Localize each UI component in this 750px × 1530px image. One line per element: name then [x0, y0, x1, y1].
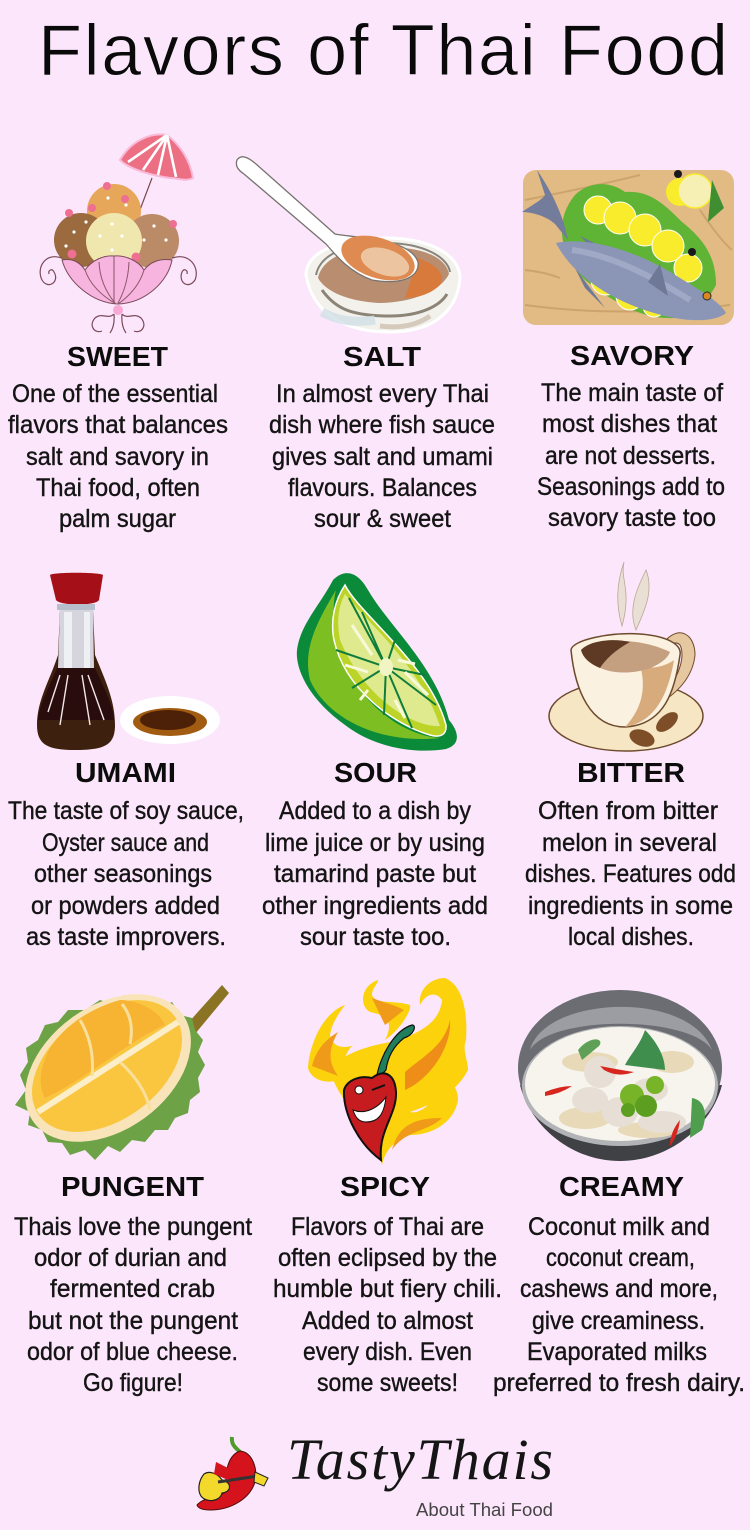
- panel: bitter: [525, 562, 736, 951]
- title: Flavors of Thai Food: [38, 11, 728, 91]
- icon: coffee cup with steam: [549, 562, 703, 751]
- text: savory description: most dishes that: [542, 410, 717, 438]
- tagline: About Thai Food: [416, 1500, 553, 1520]
- icon: bowl of fish sauce with spoon: [236, 157, 460, 332]
- text: sour description: sour taste too.: [300, 923, 451, 951]
- text: sweet description: [8, 380, 228, 533]
- panel: pungent: [0, 964, 252, 1397]
- text: bitter description: local dishes.: [568, 923, 694, 951]
- heading: creamy: CREAMY: [559, 1171, 684, 1202]
- text: savory description: The main taste of: [541, 379, 723, 407]
- panel: umami: [8, 573, 244, 951]
- text: creamy description: preferred to fresh dairy.: [493, 1369, 745, 1397]
- text: salt description: flavours. Balances: [288, 474, 477, 502]
- text: salt description: In almost every Thai: [276, 380, 489, 408]
- text: sweet description: One of the essential: [12, 380, 218, 408]
- text: umami description: other seasonings: [34, 860, 212, 888]
- heading: sweet: SWEET: [67, 341, 168, 372]
- text: spicy description: Added to almost: [302, 1307, 473, 1335]
- panel: sweet: [8, 134, 228, 533]
- text: salt description: gives salt and umami: [272, 443, 493, 471]
- panel: savory: [522, 170, 734, 532]
- heading: umami: UMAMI: [75, 757, 176, 788]
- text: pungent description: odor of durian and: [34, 1244, 227, 1272]
- text: creamy description: coconut cream,: [546, 1244, 695, 1272]
- text: spicy description: some sweets!: [317, 1369, 458, 1397]
- text: pungent description: Thais love the pungent: [14, 1213, 252, 1241]
- icon: durian: [0, 964, 229, 1172]
- text: creamy description: Coconut milk and: [528, 1213, 710, 1241]
- text: pungent description: but not the pungent: [28, 1307, 238, 1335]
- text: sour description: lime juice or by using: [265, 829, 485, 857]
- heading: pungent: PUNGENT: [61, 1171, 204, 1202]
- text: sour description: tamarind paste but: [274, 860, 476, 888]
- icon: ice cream sundae with umbrella: [40, 134, 196, 333]
- heading: spicy: SPICY: [340, 1171, 430, 1202]
- text: pungent description: fermented crab: [50, 1275, 215, 1303]
- text: creamy description: [493, 1213, 745, 1397]
- text: savory description: savory taste too: [548, 504, 716, 532]
- logo: TastyThais: [197, 1427, 553, 1520]
- text: sour description: other ingredients add: [262, 892, 488, 920]
- panel: spicy: [273, 978, 502, 1397]
- text: savory description: Seasonings add to: [537, 473, 725, 501]
- text: spicy description: often eclipsed by the: [278, 1244, 497, 1272]
- text: savory description: [537, 379, 725, 532]
- text: salt description: sour & sweet: [314, 505, 451, 533]
- text: spicy description: humble but fiery chili.: [273, 1275, 502, 1303]
- text: salt description: [269, 380, 495, 533]
- text: umami description: Oyster sauce and: [42, 829, 209, 857]
- text: creamy description: give creaminess.: [532, 1307, 705, 1335]
- text: bitter description: Often from bitter: [538, 797, 718, 825]
- text: savory description: are not desserts.: [545, 442, 716, 470]
- text: salt description: dish where fish sauce: [269, 411, 495, 439]
- text: umami description: as taste improvers.: [26, 923, 226, 951]
- text: sweet description: flavors that balances: [8, 411, 228, 439]
- text: bitter description: [525, 797, 736, 951]
- heading: salt: SALT: [343, 341, 421, 372]
- text: sour description: Added to a dish by: [279, 797, 471, 825]
- text: pungent description: [14, 1213, 252, 1397]
- text: pungent description: Go figure!: [83, 1369, 183, 1397]
- text: sweet description: Thai food, often: [36, 474, 200, 502]
- icon: chili with flames: [308, 978, 468, 1165]
- text: umami description: [8, 797, 244, 951]
- text: umami description: or powders added: [31, 892, 220, 920]
- icon: fish on cutting board with lemon: [522, 170, 734, 325]
- icon: soy sauce bottle and dish: [37, 573, 220, 750]
- text: pungent description: odor of blue cheese.: [27, 1338, 238, 1366]
- text: bitter description: ingredients in some: [528, 892, 733, 920]
- text: spicy description: [273, 1213, 502, 1397]
- icon: bowl of coconut soup: [518, 990, 722, 1161]
- text: umami description: The taste of soy sauce,: [8, 797, 244, 825]
- wordmark: TastyThais: [287, 1427, 553, 1492]
- icon: lime wedge: [297, 573, 457, 751]
- text: sour description: [262, 797, 488, 951]
- panel: salt: [236, 157, 495, 533]
- icon: chili playing guitar: [197, 1437, 268, 1510]
- text: spicy description: every dish. Even: [303, 1338, 472, 1366]
- text: spicy description: Flavors of Thai are: [291, 1213, 484, 1241]
- text: sweet description: salt and savory in: [26, 443, 209, 471]
- text: bitter description: melon in several: [542, 829, 717, 857]
- panel: creamy: [493, 990, 745, 1397]
- text: creamy description: Evaporated milks: [527, 1338, 707, 1366]
- panel: sour: [262, 573, 488, 951]
- text: sweet description: palm sugar: [59, 505, 176, 533]
- heading: bitter: BITTER: [577, 757, 685, 788]
- heading: savory: SAVORY: [570, 340, 694, 371]
- text: creamy description: cashews and more,: [520, 1275, 718, 1303]
- heading: sour: SOUR: [334, 757, 417, 788]
